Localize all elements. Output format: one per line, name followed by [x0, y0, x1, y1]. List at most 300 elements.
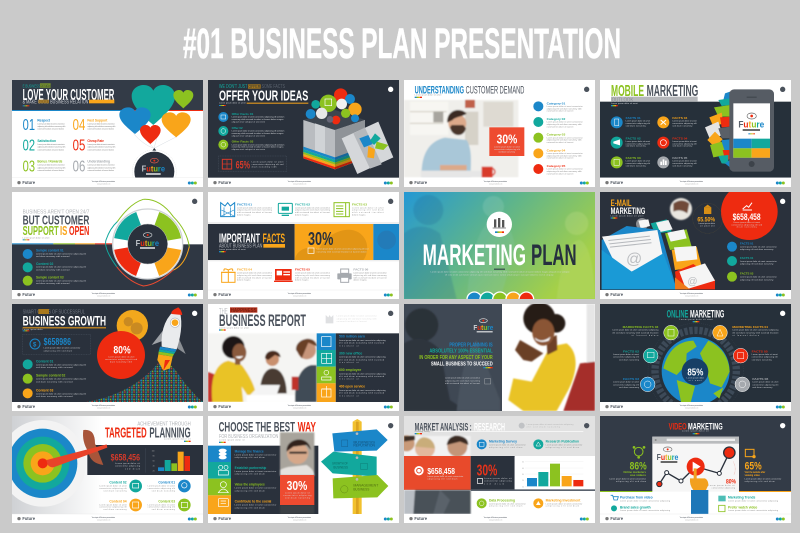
slide 1: love your customer: [12, 80, 203, 187]
labels: left facts: sed diam nonummy: [619, 359, 639, 361]
heading: MARKETING: [690, 308, 724, 320]
heading: OPEN: [69, 223, 89, 238]
list: sample content: Sample content 01: [36, 249, 64, 253]
list: colour tiles: 300 new office: [339, 351, 362, 355]
row: top facts: dolore magna: [237, 214, 251, 216]
list: sample content: sed diam nonummy nibh euismod: [36, 256, 69, 258]
heading: [23, 309, 106, 331]
illustration: browser window chart: 80%: [726, 480, 737, 486]
quote text: ABSOLUTELY 100% ESSENTIAL: [429, 349, 493, 355]
list: numbered items: [23, 117, 115, 176]
list: bottom items: Lorem ipsum dolor sit amet consectetur adipiscing: [620, 509, 670, 512]
stat: 86 percent: adipiscing elit sed diam: [616, 480, 646, 483]
footer: Future: [218, 292, 232, 297]
footer: Your topic of Business presentation: [484, 180, 507, 183]
illustration: signpost: REPUTATION: [353, 444, 376, 448]
stat: 86 percent: 86%: [630, 460, 647, 472]
list: categories: Category 01: [547, 101, 566, 105]
list: categories: Lorem ipsum dolor sit amet consectetur: [547, 168, 583, 171]
heading: SMART GOALS OF SUCCESSFUL: [23, 310, 85, 316]
footer: [12, 514, 203, 523]
callout: 65 percent: 65%: [236, 160, 250, 172]
icon: dark dot: [584, 87, 589, 92]
heading: Lorem ipsum dolor sit amet: [219, 326, 249, 329]
illustration: envelopes: @: [626, 251, 642, 268]
footer: [404, 178, 595, 187]
heading: ONLINE: [667, 308, 688, 320]
footer: Your topic of Business presentation: [484, 516, 507, 519]
heading: & MAKE GOOD BUSINESS RELATION: [23, 99, 89, 105]
stat: 86 percent: use videos: [630, 473, 647, 477]
photo: people: [399, 435, 471, 458]
row: bottom facts: nibh euismod tincidunt ut laoreet: [353, 276, 387, 279]
band: important facts: [208, 222, 399, 261]
slide 15: market analysis research: [404, 416, 595, 523]
logo: Future: [473, 323, 493, 332]
list: offers: Lorem ipsum dolor sit amet consectetur adipiscing elit sed diam: [232, 143, 285, 146]
footer: www.yourwebsite.com: [685, 182, 699, 185]
footer: [600, 514, 791, 523]
dark panel: [600, 416, 791, 492]
quote text: PROPER PLANNING IS: [449, 343, 493, 349]
callout: 30 percent: consectetur adipiscing elit: [494, 148, 520, 151]
heading: DESIGN: [40, 83, 50, 88]
callout: red amount: adipiscing elit sed diam: [427, 478, 458, 481]
photo: smiling woman: [508, 302, 595, 411]
list: numbered items: 04: [73, 117, 86, 134]
list: colour tiles: 400 open service: [339, 385, 365, 389]
heading: WAY: [298, 419, 316, 435]
footer: Your topic of Business presentation: [680, 292, 703, 295]
illustration: phone: [729, 89, 774, 172]
footer: Your topic of Business presentation: [92, 180, 115, 183]
illustration: phone: Future: [738, 120, 764, 130]
labels: right facts: consectetur adipiscing elit: [752, 356, 778, 359]
heading: [669, 421, 723, 434]
list: offers: Offer 02: [232, 126, 243, 130]
heading: WE DON'T JUST: [219, 84, 247, 90]
bar chart: [515, 457, 595, 489]
illustration: browser window chart: [652, 437, 739, 492]
band: important facts: nonummy nibh euismod tincidunt ut laoreet dolore: [317, 250, 368, 253]
list: top items: adipiscing elit sed diam: [489, 446, 523, 449]
list: bottom items: Lorem ipsum dolor sit amet consectetur adipiscing: [728, 509, 778, 512]
bar chart: 50: [522, 462, 524, 464]
heading: MARKETING: [688, 421, 723, 431]
list: tiles: Manage the finance: [235, 449, 264, 453]
slide 13: targeted planning: [12, 416, 203, 523]
heading: [219, 307, 306, 331]
list: bottom items: Marketing Investment: [546, 498, 581, 502]
list: colour tiles: elit sed diam nonummy nibh euismod: [339, 375, 384, 378]
callout: dollar amount: adipiscing elit sed diam: [44, 349, 72, 352]
list: top items: Research Publication: [546, 440, 579, 444]
row: bottom facts: Lorem ipsum dolor sit amet consectetur: [237, 272, 272, 275]
list: numbered items: Bonus / Rewards: [37, 160, 62, 164]
illustration: lifebuoy: [106, 199, 189, 286]
list: categories: Category 05: [547, 164, 566, 168]
heading: IS: [60, 223, 68, 238]
heading: Lorem ipsum dolor sit: [164, 438, 191, 441]
list: bottom items: adipiscing elit sed diam: [489, 505, 523, 508]
heading: Lorem ipsum dolor sit: [219, 439, 245, 442]
footer: [12, 178, 203, 187]
footer: [600, 290, 791, 299]
list: content: Lorem ipsum dolor sit amet: [148, 485, 175, 488]
callout: dollar amount: $: [33, 342, 37, 348]
icon: white dot: [780, 199, 785, 204]
row: bottom facts: adipiscing elit sed diam nonummy: [295, 274, 330, 277]
illustration: signpost: MANAGEMENT: [353, 484, 378, 488]
footer: Your topic of Business presentation: [288, 516, 311, 519]
text block: nibh euismod tincidunt ut laoreet: [445, 382, 480, 385]
list: bottom items: [477, 498, 583, 508]
list: offers: Offer Facts 03: [232, 140, 254, 144]
list: numbered items: adipiscing elit sed diam nonummy nibh: [37, 125, 65, 128]
list: numbered items: adipiscing elit sed diam nonummy nibh: [87, 125, 115, 128]
list: content: sed diam nonummy: [152, 509, 175, 511]
heading: [23, 209, 90, 240]
list: tiles: Value the employees: [235, 483, 265, 487]
illustration: fan of tiles: [705, 92, 730, 167]
row: top facts: nibh euismod tincidunt ut laoreet: [295, 211, 330, 214]
list: numbered items: Lorem ipsum dolor sit amet consectetur: [37, 143, 65, 146]
illustration: icon ring and globe: [648, 323, 743, 419]
list: numbered items: adipiscing elit sed diam nonummy nibh: [37, 166, 65, 169]
labels: left facts: Lorem ipsum dolor sit amet consectetur adipiscing: [612, 329, 658, 332]
list: colour tiles: elit sed diam nonummy nibh euismod: [339, 392, 384, 395]
callout: red circle amount: consectetur adipiscing elit sed: [731, 223, 762, 226]
slide 3: understanding customer demand: [404, 80, 595, 187]
panel: dark band with chart: consectetur adipiscing: [115, 465, 140, 468]
panel: dark band with chart: [87, 445, 203, 475]
list: facts: FACTS 04: [672, 136, 688, 140]
list: facts: adipiscing elit sed diam nonummy: [740, 248, 773, 251]
list: offers: aliquam erat volutpat ut wisi enim: [232, 148, 265, 151]
list: content: Lorem ipsum dolor sit amet consectetur adipiscing elit: [36, 392, 86, 395]
illustration: envelopes: [602, 218, 715, 289]
row: bottom facts: dolore magna: [237, 280, 251, 282]
panel: dark band with chart: 40: [153, 466, 155, 468]
list: tiles: adipiscing elit sed diam: [235, 489, 265, 492]
heading: Lorem ipsum dolor sit amet: [23, 236, 50, 239]
icon: white dot: [780, 311, 785, 316]
list: numbered items: Lorem ipsum dolor sit amet consectetur: [37, 164, 65, 167]
list: tiles: adipiscing elit sed diam: [235, 506, 265, 509]
list: facts: FACTS 04: [672, 116, 688, 120]
labels: left facts: ut laoreet dolore: [632, 334, 659, 337]
list: facts: sed diam nonummy: [672, 125, 692, 127]
band: important facts: FACTS: [263, 232, 285, 246]
list: facts: consectetur adipiscing elit: [626, 142, 650, 145]
list: numbered items: euismod tincidunt ut laoreet dolore: [37, 128, 65, 131]
list: colour tiles: elit sed diam nonummy nibh euismod: [339, 358, 384, 361]
list: numbered items: Fast Support: [87, 118, 108, 122]
footer: Future: [22, 516, 36, 521]
list: facts: consectetur adipiscing elit: [672, 142, 697, 145]
list: facts: adipiscing elit sed diam nonummy: [740, 263, 773, 266]
heading: CHOOSE THE BEST: [219, 419, 295, 435]
list: bottom items: Lorem ipsum dolor sit amet consectetur adipiscing: [620, 499, 670, 502]
panel: dark band with chart: Lorem ipsum dolor sit: [115, 462, 140, 465]
row: top facts: nibh euismod tincidunt ut laoreet: [237, 211, 272, 214]
callout: 80 percent: diam nonummy nibh: [110, 362, 132, 364]
logo: [473, 319, 493, 332]
icon: white dot: [192, 311, 197, 316]
text block: Lorem ipsum dolor sit amet consectetur: [445, 377, 480, 380]
list: colour tiles: Lorem ipsum dolor sit amet consectetur adipiscing: [339, 339, 386, 342]
list: tiles: Establish partnership: [235, 466, 266, 470]
list: facts: FACTS 01: [626, 116, 641, 120]
row: bottom facts: adipiscing elit sed diam nonummy: [237, 274, 272, 277]
callout: 30 percent: [489, 127, 524, 156]
labels: right facts: ut laoreet dolore: [732, 334, 760, 337]
list: content: Content 01: [36, 359, 53, 363]
list: sample content: Lorem ipsum dolor sit amet consectetur adipiscing elit: [36, 279, 86, 282]
footer: www.yourwebsite.com: [489, 518, 503, 521]
stat: 65.50 percent: sit amet elit: [700, 225, 715, 228]
callout: red circle amount: [721, 183, 778, 240]
slide 14: choose the best way: [208, 416, 399, 523]
slide 16: video marketing: [600, 416, 791, 523]
footer: Future: [414, 180, 428, 185]
list: content: Content 01: [158, 481, 175, 485]
row: bottom facts: [221, 268, 387, 282]
list: colour tiles: Lorem ipsum dolor sit amet consectetur adipiscing: [339, 372, 386, 375]
callout: red amount: [404, 456, 471, 490]
icon: white dot: [780, 423, 785, 428]
heading: HAPPINESS: [231, 308, 257, 314]
footer: Your topic of Business presentation: [680, 516, 703, 519]
callout: red circle amount: diam nonummy: [737, 227, 757, 229]
footer: Future: [610, 292, 624, 297]
panel: dark left: [404, 304, 502, 411]
list: content: sed diam nonummy: [103, 509, 127, 511]
heading: Lorem ipsum dolor sit amet: [611, 102, 638, 105]
panel: dark band with chart: sed diam: [125, 468, 140, 470]
footer: Future: [22, 180, 36, 185]
list: bottom items: Lorem ipsum dolor sit amet consectetur adipiscing: [728, 499, 778, 502]
callout: 30 percent: sed diam nonummy: [498, 152, 515, 154]
slide 11: proper planning quote: [404, 304, 595, 411]
footer: www.yourwebsite.com: [97, 518, 111, 521]
list: numbered items: Lorem ipsum dolor sit amet consectetur: [87, 143, 115, 146]
header note: [326, 315, 377, 323]
photo: man in suit: [404, 490, 471, 514]
illustration: icon ring and globe: sit amet: [689, 379, 702, 382]
heading: SOME FACTS: [262, 84, 285, 90]
list: content: Content 02: [109, 481, 127, 485]
row: bottom facts: dolore magna: [353, 280, 368, 282]
row: bottom facts: nibh euismod tincidunt ut laoreet: [295, 276, 330, 279]
row: bottom facts: FACTS 05: [295, 268, 310, 272]
labels: left facts: elit sed diam nonummy nibh euismod tincidunt: [612, 331, 659, 334]
footer: Future: [610, 516, 624, 521]
list: content: Content 03: [36, 388, 53, 392]
list: tiles: [208, 446, 318, 514]
labels: right facts: sed diam nonummy: [752, 387, 772, 389]
slide 2: offer your ideas: [208, 80, 399, 187]
list: content: Content 03: [158, 499, 175, 503]
callout: 80 percent: 80%: [113, 344, 131, 356]
heading: Lorem ipsum dolor sit amet: [611, 214, 644, 217]
list: top items: Marketing Survey: [489, 440, 517, 444]
heading: E-MAIL: [611, 198, 632, 208]
list: categories: euismod tincidunt ut laoreet: [547, 110, 574, 113]
row: bottom facts: Lorem ipsum dolor sit amet consectetur: [295, 272, 330, 275]
illustration: signpost: BUSINESS: [353, 440, 376, 444]
row: top facts: adipiscing elit sed diam: [352, 209, 384, 212]
band: important facts: 30%: [308, 229, 333, 249]
list: bottom items: Lorem ipsum dolor sit amet consectetur: [546, 502, 583, 505]
callout: 30 percent: 30%: [497, 131, 517, 146]
row: top facts: FACTS 03: [352, 202, 367, 206]
list: bottom items: Marketing Trends: [728, 496, 755, 500]
panel: dark band with chart: $658,456: [111, 453, 140, 463]
heading: MARKET ANALYSIS :: [415, 422, 472, 434]
heading: RESEARCH: [474, 422, 505, 434]
list: tiles: adipiscing elit sed diam: [235, 473, 265, 476]
illustration: browser window chart: Future: [657, 452, 678, 462]
footer: Future: [22, 404, 36, 409]
divider bar: [471, 489, 595, 491]
callout: 30 percent dark: 30%: [477, 463, 498, 480]
list: content: sed diam nonummy: [152, 490, 175, 492]
labels: right facts: [732, 325, 779, 389]
callout: 80 percent: Lorem ipsum dolor sit amet: [108, 355, 135, 358]
text block: Ut wisi enim ad minim veniam quis nostrud exerci tation ullamcorper suscipit lobortis nisl ut aliquip: [445, 273, 554, 276]
labels: left facts: FACTS 02: [623, 349, 639, 353]
callout: 65 percent: diam nonummy nibh: [252, 167, 277, 169]
icon: dark dot: [780, 87, 785, 92]
heading: Lorem ipsum dolor sit amet: [219, 102, 246, 105]
row: top facts: [221, 202, 384, 217]
footer: Your topic of Business presentation: [680, 180, 703, 183]
icon: dark dot: [388, 199, 393, 204]
list: numbered items: euismod tincidunt ut laoreet dolore: [87, 169, 115, 172]
callout: 30 percent dark: [471, 456, 515, 490]
list: numbered items: Cheap Rate: [87, 139, 104, 143]
list: facts: sed diam nonummy: [626, 165, 646, 167]
row: bottom facts: FACTS 06: [353, 268, 369, 272]
labels: right facts: FACTS 06: [752, 377, 769, 381]
heading: Lorem ipsum dolor sit amet: [679, 318, 713, 321]
stat: 86 percent: Online marketers: [623, 470, 647, 474]
text block: adipiscing elit sed diam nonummy: [445, 379, 480, 382]
list: content: consectetur adipiscing elit: [148, 506, 175, 509]
list: top items: Lorem ipsum dolor sit amet consectetur: [546, 444, 583, 447]
stat: 65 percent: Lorem ipsum dolor sit amet consectetur: [745, 477, 782, 480]
list: colour tiles: 500 million earn: [339, 335, 365, 339]
row: coloured circles: [467, 292, 534, 307]
footer: [12, 290, 203, 299]
heading: BUSINESS AREN'T OPEN 24/7: [23, 209, 89, 215]
stat: 86 percent: Lorem ipsum dolor sit amet consectetur: [609, 477, 646, 480]
row: bottom facts: nibh euismod tincidunt ut laoreet: [237, 276, 272, 279]
footer: Your topic of Business presentation: [288, 404, 311, 407]
header note: euismod tincidunt ut laoreet: [337, 320, 367, 323]
list: facts: [611, 116, 697, 168]
heading: FOR BUSINESS ORGANIZATION: [219, 434, 278, 440]
footer: [208, 514, 399, 523]
list: facts: Lorem ipsum dolor sit amet consectetur: [740, 260, 777, 263]
list: numbered items: 06: [73, 159, 85, 176]
heading: THE: [219, 307, 228, 316]
list: categories: Category 02: [547, 117, 566, 121]
labels: left facts: consectetur adipiscing elit: [613, 383, 639, 386]
row: top facts: FACTS 02: [295, 202, 310, 206]
row: bottom facts: FACTS 04: [237, 268, 252, 272]
illustration: icon ring and globe: 85%: [687, 367, 703, 378]
labels: left facts: Lorem ipsum dolor sit amet: [613, 381, 639, 384]
footer: www.yourwebsite.com: [685, 406, 699, 409]
list: bottom items: [611, 495, 778, 512]
labels: left facts: Lorem ipsum dolor sit amet: [613, 353, 639, 356]
list: facts: Lorem ipsum dolor sit amet: [672, 120, 697, 123]
list: categories: adipiscing elit sed diam nonummy nibh: [547, 154, 582, 157]
callout: red circle amount: Lorem ipsum dolor sit amet: [733, 221, 760, 224]
heading: BUSINESS GROWTH: [23, 313, 106, 329]
stat: 65 percent: 65%: [745, 460, 762, 472]
list: facts: consectetur adipiscing elit: [626, 162, 650, 165]
slide 8: e-mail marketing: [600, 192, 791, 299]
panel: dark band with chart: 80: [153, 456, 155, 458]
list: facts: [727, 241, 777, 282]
illustration: orange moon: [117, 310, 148, 341]
badge: future logo circle: [132, 148, 176, 194]
list: categories: euismod tincidunt ut laoreet: [547, 157, 574, 160]
photo: faded people: [404, 195, 595, 299]
list: content: Lorem ipsum dolor sit amet: [148, 503, 175, 506]
illustration: browser window chart: Lorem ipsum dolor sit: [708, 484, 735, 487]
list: numbered items: Lorem ipsum dolor sit amet consectetur: [37, 122, 65, 125]
list: numbered items: adipiscing elit sed diam nonummy nibh: [37, 146, 65, 149]
list: facts: FACTS 03: [626, 156, 641, 160]
heading: BUSINESS REPORT: [219, 312, 306, 330]
footer: Future: [218, 180, 232, 185]
heading: TARGETED: [105, 425, 147, 441]
list: tiles: Lorem ipsum dolor sit amet consectetur: [235, 470, 277, 473]
slide 4: mobile marketing: [600, 80, 791, 187]
illustration: browser window chart: consectetur adipiscing: [712, 487, 735, 490]
list: categories: adipiscing elit sed diam nonummy nibh: [547, 123, 582, 126]
list: offers: nonummy nibh euismod tincidunt ut laoreet dolore magna: [232, 132, 284, 135]
list: colour tiles: tincidunt ut: [339, 378, 359, 381]
callout: red circle amount: $658,458: [733, 212, 761, 222]
photo: man with glasses: [280, 432, 314, 514]
list: facts: sed diam nonummy: [672, 146, 692, 148]
illustration: envelopes: @: [687, 277, 697, 288]
illustration: icon trail: [86, 357, 203, 402]
footer: www.yourwebsite.com: [293, 406, 307, 409]
photo: business team: [208, 333, 317, 402]
dark panel: [600, 102, 791, 178]
footer: Future: [414, 516, 428, 521]
callout: 30 percent dark: Lorem ipsum dolor sit: [484, 477, 512, 480]
footer: Your topic of Business presentation: [288, 292, 311, 295]
row: top facts: Lorem ipsum dolor sit amet consectetur: [295, 206, 330, 209]
stat: 65 percent: adipiscing elit sed diam: [745, 480, 775, 483]
list: facts: FACTS 03: [740, 272, 754, 276]
footer: Your topic of Business presentation: [288, 180, 311, 183]
heading: CUSTOMER DEMAND: [466, 84, 524, 96]
footer: Your topic of Business presentation: [680, 404, 703, 407]
list: categories: euismod tincidunt ut laoreet: [547, 141, 574, 144]
slide 6: important facts: [208, 192, 399, 299]
list: categories: Lorem ipsum dolor sit amet consectetur: [547, 105, 583, 108]
header note: Lorem ipsum dolor sit amet consectetur: [337, 315, 377, 318]
list: content: consectetur adipiscing elit: [99, 487, 127, 490]
